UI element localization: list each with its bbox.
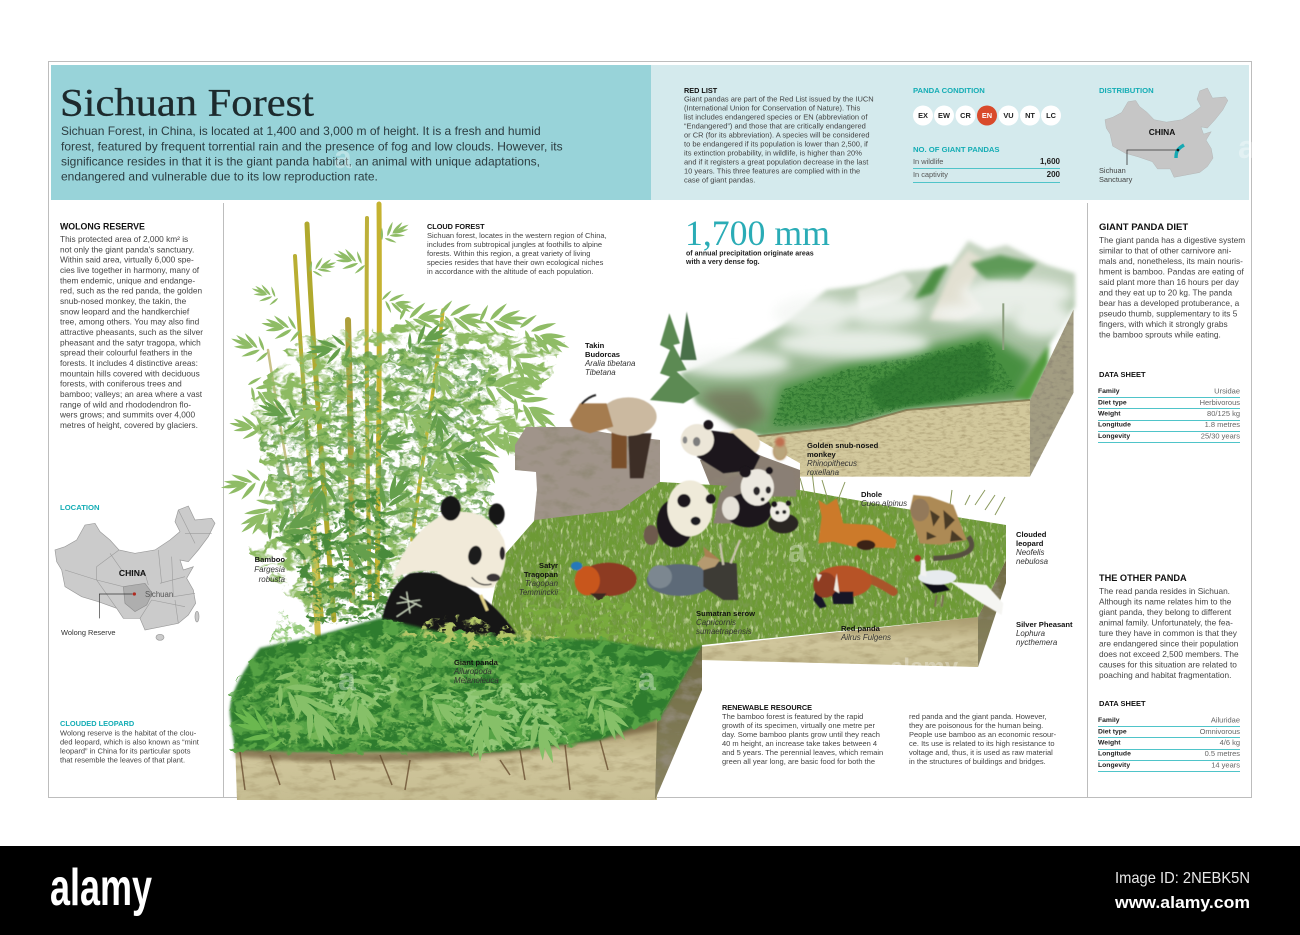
data sheet: red panda: Ailuridae bbox=[1211, 716, 1240, 724]
panel: the other panda text: causes for this situation are related to bbox=[1099, 660, 1237, 670]
number of giant pandas table: NO. OF GIANT PANDAS bbox=[913, 145, 1000, 154]
panel: clouded leopard note: Wolong reserve is the habitat of the clou- bbox=[60, 728, 197, 738]
distribution map: Sanctuary bbox=[1099, 175, 1133, 184]
panda condition scale: EN bbox=[982, 111, 992, 120]
title: Sichuan Forest bbox=[60, 82, 314, 124]
label: cloud forest text bbox=[427, 222, 607, 276]
red list text: 10 years. This three features are complied with in the bbox=[684, 166, 860, 176]
distribution map: DISTRIBUTION bbox=[1099, 86, 1154, 95]
panda condition scale: LC bbox=[1046, 111, 1057, 120]
red list text: list includes endangered species or EN (abbreviation of bbox=[684, 112, 868, 122]
panel: wolong reserve text: forests, with coniferous trees and bbox=[60, 379, 182, 389]
label: red panda: Ailrus Fulgens bbox=[840, 633, 891, 642]
label: sumatran serow: sumaetrapensis bbox=[696, 627, 752, 636]
watermarks: a bbox=[334, 139, 352, 175]
illustration: foreground leaf sprays bbox=[260, 661, 645, 771]
panel: giant panda diet text: fingers, with which it strongly grabs bbox=[1099, 319, 1228, 329]
red list text bbox=[684, 86, 874, 184]
panel: location map: LOCATION bbox=[60, 503, 100, 512]
seedling bbox=[223, 696, 293, 759]
panel: wolong reserve text: metres of height, covered by glaciers. bbox=[60, 420, 198, 430]
panel: wolong reserve text: red, such as the red panda, the golden bbox=[60, 286, 202, 296]
panel: wolong reserve text: range of wild and rhododendron flo- bbox=[60, 399, 191, 409]
panel: giant panda diet text: and they eat up to 20 kg. The panda bbox=[1099, 288, 1233, 298]
panel: wolong reserve text: bamboo; valleys; an area where a vast bbox=[60, 389, 203, 399]
panel: wolong reserve text: mountain hills covered with deciduous bbox=[60, 368, 200, 378]
data sheet: giant panda: 25/30 years bbox=[1201, 432, 1240, 440]
watermarks: a bbox=[338, 661, 356, 697]
illustration: middle block soil bbox=[690, 560, 1006, 667]
red list text: and if it registers a great population decrease in the last bbox=[684, 158, 869, 166]
data sheet: red panda: Longevity bbox=[1098, 762, 1130, 769]
red list text: (International Union for Conservation of Nature). This bbox=[684, 104, 860, 112]
red list text: case of giant pandas. bbox=[684, 176, 755, 184]
clouded leopard bbox=[910, 495, 972, 558]
watermarks: a bbox=[788, 533, 806, 569]
panel: wolong reserve text: attractive pheasants, such as the silver bbox=[60, 327, 203, 337]
data sheet: giant panda: Longevity bbox=[1098, 433, 1130, 440]
label: takin: Tibetana bbox=[585, 368, 616, 377]
label: sumatran serow: Sumatran serow bbox=[696, 609, 755, 618]
panel: renewable resource text: The bamboo forest is featured by the rapid bbox=[722, 712, 863, 721]
label: satyr tragopan: Tragopan bbox=[524, 570, 558, 579]
label: red panda: Red panda bbox=[841, 624, 881, 633]
panda condition scale: EX bbox=[918, 111, 928, 120]
label: takin: Aralia tibetana bbox=[584, 359, 636, 368]
panel: wolong reserve text: wers grows; and summits over 4,000 bbox=[59, 410, 195, 420]
panel: location map bbox=[55, 503, 215, 640]
red list text: RED LIST bbox=[684, 86, 718, 95]
label: clouded leopard: Neofelis bbox=[1016, 548, 1045, 557]
panel: renewable resource text: RENEWABLE RESOURCE bbox=[722, 703, 812, 712]
label: takin: Takin bbox=[585, 341, 605, 350]
mountain bbox=[680, 241, 1075, 437]
data sheet: giant panda: DATA SHEET bbox=[1099, 370, 1146, 379]
animals: pandas, serow, dhole, leopard, red panda, pheasant bbox=[644, 466, 1003, 615]
label: giant panda: Giant panda bbox=[454, 658, 499, 667]
panel: giant panda diet text: The giant panda has a digestive system bbox=[1099, 235, 1245, 245]
watermarks: a bbox=[638, 661, 656, 697]
panel: clouded leopard note: CLOUDED LEOPARD bbox=[60, 719, 135, 728]
data sheet: giant panda: Longitude bbox=[1098, 422, 1131, 428]
serow bbox=[647, 540, 740, 600]
data sheet: red panda bbox=[1098, 699, 1240, 772]
dhole bbox=[818, 498, 897, 550]
illustration: meadow shrubs near tragopan bbox=[520, 590, 680, 660]
distribution map bbox=[1099, 86, 1228, 184]
panel: wolong reserve text: snow leopard and the handkerchief bbox=[60, 306, 190, 316]
label: cloud forest text: in accordance with the altitude of each population. bbox=[427, 267, 593, 276]
panel: renewable resource text: in the structures of buildings and bridges. bbox=[909, 757, 1046, 766]
animal: giant panda on rock bbox=[681, 420, 787, 473]
panel: the other panda text: poaching and habitat fragmentation. bbox=[1099, 670, 1231, 680]
panel: wolong reserve text bbox=[59, 222, 203, 430]
panel: wolong reserve text: pheasant and the satyr tragopa, which bbox=[60, 337, 201, 347]
data sheet: red panda: Family bbox=[1098, 717, 1120, 724]
red list text: Giant pandas are part of the Red List issued by the IUCN bbox=[684, 94, 874, 104]
label: dhole: Dhole bbox=[861, 490, 882, 499]
panel: the other panda text: are endangered since their population bbox=[1099, 638, 1239, 648]
panel: wolong reserve text: WOLONG RESERVE bbox=[60, 222, 145, 232]
label: golden snub-nosed monkey: roxellana bbox=[807, 468, 840, 477]
panel: header data strip bbox=[651, 65, 1249, 200]
number of giant pandas table: 200 bbox=[1047, 170, 1061, 179]
panda condition scale: VU bbox=[1003, 111, 1014, 120]
panel: wolong reserve text: spread their colourful feathers in the bbox=[60, 348, 193, 358]
intro paragraph bbox=[61, 124, 563, 184]
panel: giant panda diet text: hment is bamboo. Pandas are eating of bbox=[1099, 266, 1245, 276]
animal: small snub-nosed monkey bbox=[773, 437, 787, 460]
panda sitting left bbox=[644, 480, 716, 547]
panel: renewable resource text: red panda and the giant panda. However, bbox=[909, 712, 1047, 721]
panel: clouded leopard note: leopard” in China for its particular spots bbox=[60, 746, 191, 756]
data sheet: giant panda: Family bbox=[1098, 388, 1120, 395]
label: silver pheasant: Lophura bbox=[1016, 629, 1046, 638]
frame bbox=[48, 62, 1252, 798]
site url: www.alamy.com bbox=[1114, 893, 1250, 912]
bamboo stems bbox=[268, 204, 443, 640]
panel: renewable resource text: green all year long, are basic food for both the bbox=[722, 757, 875, 766]
panel: renewable resource text: they are poisonous for the human being. bbox=[909, 721, 1043, 730]
animal: main giant panda bbox=[382, 496, 516, 642]
label: sumatran serow bbox=[696, 609, 755, 636]
panda mother on right bbox=[713, 466, 797, 527]
panel: the other panda text: giant panda, they belong to different bbox=[1099, 607, 1232, 617]
panel: wolong reserve text: snub-nosed monkey, the takin, the bbox=[60, 296, 187, 306]
panel: wolong reserve text: forests. It includes 4 distinctive areas: bbox=[60, 358, 198, 368]
label: bamboo: robusta bbox=[259, 575, 286, 584]
watermarks: a bbox=[1238, 129, 1256, 165]
number of giant pandas table bbox=[913, 145, 1061, 182]
panel: wolong reserve text: cies live together in harmony, many of bbox=[60, 265, 200, 275]
label: takin bbox=[584, 341, 636, 377]
label: satyr tragopan: Temminckii bbox=[519, 588, 558, 597]
panel: renewable resource text: 40 m height, an increase take takes between 4 bbox=[722, 739, 877, 748]
data sheet: red panda: 4/6 kg bbox=[1220, 738, 1240, 747]
label: dhole bbox=[861, 490, 907, 508]
panel: the other panda text: The read panda resides in Sichuan. bbox=[1099, 586, 1230, 596]
label: cloud forest text: forests. Within this region, a great variety of living bbox=[427, 249, 590, 258]
panel: the other panda text: animal family. Unfortunately, the fea- bbox=[1099, 618, 1233, 628]
data sheet: giant panda: 80/125 kg bbox=[1207, 409, 1240, 418]
panel: wolong reserve text: This protected area of 2,000 km² is bbox=[60, 234, 188, 244]
illustration: foreground bamboo bushes bbox=[223, 610, 702, 759]
label: sumatran serow: Capricornis bbox=[696, 618, 736, 627]
label: golden snub-nosed monkey: Golden snub-nosed bbox=[807, 441, 879, 450]
data sheet: red panda: Diet type bbox=[1098, 728, 1127, 736]
panel: giant panda diet text: bear has a developed protuberance, a bbox=[1099, 298, 1240, 308]
illustration: back block cloud forest bbox=[650, 241, 1075, 477]
panel: giant panda diet text: said plant more than 16 hours per day bbox=[1099, 277, 1240, 287]
label: satyr tragopan: Satyr bbox=[539, 561, 558, 570]
leaf sprays bbox=[218, 214, 577, 547]
panel: giant panda diet text bbox=[1099, 222, 1245, 340]
footer bar bbox=[0, 846, 1300, 935]
label: golden snub-nosed monkey: monkey bbox=[807, 450, 836, 459]
intro paragraph: forest, featured by frequent torrential rain and the presence of fog and low clouds. However, its bbox=[61, 140, 563, 154]
label: golden snub-nosed monkey bbox=[807, 441, 879, 477]
intro paragraph: significance resides in that it is the giant panda habitat, an animal with unique adaptations, bbox=[61, 154, 540, 168]
distribution map: Sichuan bbox=[1099, 166, 1126, 175]
watermarks: alamy bbox=[890, 654, 959, 681]
label: clouded leopard: Clouded bbox=[1016, 530, 1047, 539]
label: giant panda bbox=[453, 658, 499, 685]
callout: 1,700 mm precipitation: of annual precipitation originate areas bbox=[686, 250, 814, 258]
label: red panda bbox=[840, 624, 891, 642]
animal: tragopan bbox=[571, 562, 637, 602]
red list text: to be endangered if its population is lower than 2,500, if bbox=[684, 140, 869, 148]
panel: location map: Sichuan bbox=[145, 590, 173, 599]
data sheet: giant panda bbox=[1098, 370, 1240, 442]
label: silver pheasant bbox=[1016, 620, 1073, 647]
panel: header title block bbox=[51, 65, 651, 200]
intro paragraph: endangered and vulnerable due to its low reproduction rate. bbox=[61, 170, 378, 184]
watermarks bbox=[334, 129, 1256, 697]
fog bbox=[677, 278, 1073, 377]
label: takin: Budorcas bbox=[585, 350, 620, 359]
panel: wolong reserve text: tree, among others. You may also find bbox=[60, 317, 200, 327]
data sheet: giant panda: Ursidae bbox=[1214, 386, 1240, 396]
label: silver pheasant: nycthemera bbox=[1016, 638, 1058, 647]
label: bamboo bbox=[254, 555, 286, 584]
label: bamboo: Bamboo bbox=[255, 555, 285, 564]
red list text: “Endangered”) and those that are critically endangered bbox=[684, 122, 866, 130]
intro paragraph: Sichuan Forest, in China, is located at 1,400 and 3,000 m of height. It is a fresh and humid bbox=[61, 124, 541, 138]
panda condition scale: EW bbox=[938, 111, 950, 120]
panda condition scale: PANDA CONDITION bbox=[913, 86, 985, 95]
panel: giant panda diet text: GIANT PANDA DIET bbox=[1099, 222, 1188, 233]
label: cloud forest text: includes from subtropical jungles at foothills to alpine bbox=[427, 240, 602, 249]
illustration: meadow ground bbox=[485, 482, 1006, 723]
image id: Image ID: 2NEBK5N bbox=[1115, 870, 1250, 887]
data sheet: giant panda: Diet type bbox=[1098, 400, 1127, 406]
label: satyr tragopan bbox=[519, 561, 559, 597]
label: dhole: Cuon alpinus bbox=[861, 499, 907, 508]
label: cloud forest text: CLOUD FOREST bbox=[427, 222, 485, 231]
illustration: grass blades bbox=[800, 472, 1005, 515]
panel: clouded leopard note: that resemble the leaves of that plant. bbox=[60, 756, 185, 764]
data sheet: giant panda: 1.8 metres bbox=[1205, 420, 1240, 429]
label: clouded leopard: leopard bbox=[1016, 539, 1044, 548]
panel: renewable resource text: People use bamboo as an economic resour- bbox=[909, 730, 1057, 739]
data sheet: giant panda: Weight bbox=[1098, 410, 1121, 418]
label: clouded leopard bbox=[1016, 530, 1049, 566]
red list text: or CR (for its abbreviation). A species will be considered bbox=[684, 130, 870, 140]
label: cloud forest text: Sichuan forest, locates in the western region of China, bbox=[427, 231, 607, 240]
panel: wolong reserve text: them endemic, unique and endange- bbox=[60, 275, 195, 285]
panel: wolong reserve text: not only the giant panda's sanctuary. bbox=[60, 244, 194, 254]
panel: wolong reserve text: Within said area, virtually 6,000 spe- bbox=[60, 255, 194, 265]
panel: location map: CHINA bbox=[119, 568, 146, 578]
number of giant pandas table: In captivity bbox=[913, 170, 948, 179]
panel: renewable resource text: growth of its specimen, virtually one metre per bbox=[722, 721, 875, 730]
data sheet: red panda: 14 years bbox=[1211, 760, 1240, 770]
panel: giant panda diet text: pseudo thumb, supplementary to its 5 bbox=[1099, 308, 1238, 318]
panda cub bbox=[768, 501, 798, 533]
panel: the other panda text bbox=[1099, 573, 1239, 680]
panel: renewable resource text bbox=[722, 703, 1057, 766]
illustration: rocks bbox=[515, 427, 800, 540]
red panda bbox=[813, 566, 893, 608]
data sheet: giant panda: Herbivorous bbox=[1200, 398, 1240, 407]
panda condition scale: CR bbox=[960, 111, 971, 120]
panel: the other panda text: THE OTHER PANDA bbox=[1099, 573, 1187, 583]
panel: giant panda diet text: mals and, nonetheless, its main nouris- bbox=[1099, 256, 1243, 266]
label: golden snub-nosed monkey: Rhinopithecus bbox=[807, 459, 857, 468]
panel: giant panda diet text: similar to that of other carnivore ani- bbox=[1099, 246, 1232, 256]
number of giant pandas table: 1,600 bbox=[1040, 157, 1061, 166]
data sheet: red panda: Omnivorous bbox=[1200, 727, 1240, 736]
conifer bbox=[650, 312, 700, 403]
panel: renewable resource text: day. Some bamboo plants grow until they reach bbox=[722, 730, 880, 739]
panel: clouded leopard note: ded leopard, which is also known as “mint bbox=[60, 738, 200, 746]
red list text: its extinction probability, in wildlife, is higher than 20% bbox=[684, 148, 862, 158]
panel: clouded leopard note bbox=[60, 719, 200, 764]
data sheet: red panda: 0.5 metres bbox=[1205, 749, 1240, 758]
panel: the other panda text: does not exceed 2,500 members. The bbox=[1099, 649, 1239, 659]
label: clouded leopard: nebulosa bbox=[1016, 557, 1049, 566]
data sheet: red panda: Longitude bbox=[1098, 750, 1131, 758]
panel: the other panda text: ture they have in common is that they bbox=[1099, 628, 1238, 638]
panel: the other panda text: Although its name relates him to the bbox=[1099, 596, 1232, 606]
panda condition scale: NT bbox=[1025, 111, 1035, 120]
silver pheasant bbox=[914, 555, 1003, 615]
illustration: front block soil bbox=[235, 645, 702, 800]
panel: renewable resource text: voltage and, thus, it is used as raw material bbox=[909, 748, 1053, 757]
soil front bbox=[753, 400, 1030, 477]
data sheet: red panda: Weight bbox=[1098, 740, 1121, 746]
label: satyr tragopan: Tragopan bbox=[525, 579, 559, 588]
data sheet: red panda: DATA SHEET bbox=[1099, 699, 1146, 708]
animal: takin bbox=[570, 395, 657, 478]
label: giant panda: Melanoleuca bbox=[454, 676, 499, 685]
panda condition scale bbox=[913, 86, 1061, 126]
callout: 1,700 mm precipitation: 1,700 mm bbox=[685, 213, 830, 253]
panel: giant panda diet text: the bamboo sprouts while eating. bbox=[1099, 330, 1221, 340]
callout: 1,700 mm precipitation: with a very dense fog. bbox=[685, 259, 760, 266]
distribution map: CHINA bbox=[1149, 127, 1175, 137]
label: bamboo: Fargesia bbox=[254, 565, 286, 574]
illustration: bamboo canopy behind bbox=[218, 204, 577, 640]
panel: renewable resource text: ce. Its use is related to its high resistance to bbox=[909, 739, 1054, 748]
label: giant panda: Ailuropoda bbox=[453, 667, 492, 676]
panel: renewable resource text: and 5 years. The perennial leaves, which remain bbox=[722, 748, 883, 757]
number of giant pandas table: In wildlife bbox=[913, 157, 943, 166]
label: silver pheasant: Silver Pheasant bbox=[1016, 620, 1073, 629]
label: cloud forest text: species resides that have their own ecological niches bbox=[427, 258, 604, 267]
alamy logo: alamy bbox=[50, 859, 152, 917]
panel: location map: Wolong Reserve bbox=[61, 628, 116, 637]
